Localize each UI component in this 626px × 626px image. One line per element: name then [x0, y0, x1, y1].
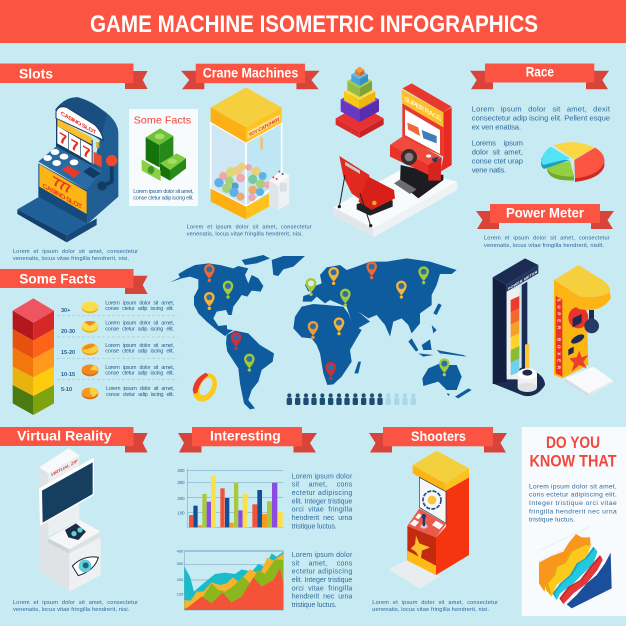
row 15-20: conse ctetur adip iscing elit. — [105, 349, 174, 355]
panel heading: DO YOU — [546, 434, 600, 452]
text: crane caption: venenatis, locus vitae fringilla hendrerit, nisi. — [187, 232, 303, 238]
panel text: Integer tristique orci vitae — [529, 500, 617, 507]
bar chart — [177, 468, 283, 527]
people pictogram — [287, 393, 416, 405]
ribbon heading: Slots: Slots — [19, 66, 53, 82]
ribbon heading: Crane Machines: Crane Machines — [203, 64, 298, 80]
row 10-15 — [61, 364, 174, 378]
stacked column chart — [13, 298, 54, 415]
text: interesting paragraph two: elit. Integer tristique — [292, 577, 352, 584]
icon: power meter machine — [493, 258, 613, 396]
text: interesting paragraph two: ectetur adipiscing — [292, 569, 352, 576]
age bracket rows — [57, 300, 178, 399]
icon: slot machine: 7 — [71, 136, 79, 157]
text: race paragraph — [472, 105, 611, 175]
panel: do you know that — [522, 427, 626, 616]
panel heading — [530, 434, 616, 471]
text: interesting paragraph two: tristique luctus. — [292, 602, 337, 609]
ribbon heading: Power Meter: Power Meter — [506, 204, 585, 220]
text: crane caption: Lorem et ipsum dolor sit amet, consectetur — [187, 225, 312, 231]
icon: slot machine: CASINO SLOT — [61, 110, 96, 137]
row 30+: 30+ — [61, 308, 70, 314]
row 10-15: 10-15 — [61, 372, 75, 378]
text: interesting paragraph one: ectetur adipiscing — [292, 490, 352, 497]
ribbon heading: Race — [470, 64, 609, 89]
text: race paragraph: Lorem ipsum dolor sit amet, dexit — [472, 105, 611, 114]
row 5-10: 5-10 — [61, 387, 72, 393]
row 20-30: conse ctetur adip iscing elit. — [105, 326, 174, 332]
world map — [170, 255, 472, 409]
text: power meter caption: venenatis, locus vitae fringilla hendrerit, nisilt. — [484, 243, 604, 249]
map pins — [204, 261, 450, 380]
panel text: fringilla hendrerit nec urna — [529, 509, 617, 516]
panel: some facts card: conse ctetur adip iscing elit. — [133, 196, 194, 202]
ribbon heading: Shooters: Shooters — [411, 428, 466, 444]
row 5-10: conse ctetur adip iscing elit. — [106, 392, 174, 398]
icon: money stacks — [142, 128, 186, 181]
text: interesting paragraph one — [292, 473, 353, 530]
icon: toy pyramid — [336, 67, 384, 138]
icon: slot machine: 777 — [53, 174, 71, 199]
panel: some facts card — [129, 109, 198, 206]
ribbon heading: Virtual Reality — [0, 427, 148, 452]
panel text — [529, 483, 617, 524]
icon: power meter machine: POWER METER — [508, 269, 537, 291]
row 10-15: Lorem ipsum dolor sit amet, — [105, 365, 174, 371]
bar chart: 300 — [177, 480, 185, 485]
icon: racing arcade machine: SUPER RACE — [404, 95, 442, 123]
pie chart — [541, 142, 604, 182]
text: slots caption — [13, 249, 138, 262]
text: virtual reality caption: venenatis, locus vitae fringilla hendrerit, nisi. — [13, 607, 130, 613]
ribbon heading: Crane Machines — [181, 64, 320, 89]
title: GAME MACHINE ISOMETRIC INFOGRAPHICS — [90, 11, 538, 38]
text: slots caption: venenatis, locus vitae fringilla hendrerit, nisi. — [13, 256, 129, 262]
row 30+: Lorem ipsum dolor sit amet, — [105, 300, 174, 306]
ribbon heading: Race: Race — [526, 64, 554, 80]
row 5-10: Lorem ipsum dolor sit amet, — [106, 386, 174, 392]
text: race paragraph: Lorems ipsum — [472, 139, 523, 148]
row 30+: conse ctetur adip iscing elit. — [105, 306, 174, 312]
icon: shooter arcade machine — [388, 451, 469, 588]
panel: some facts card: Some Facts — [134, 114, 191, 126]
area chart: 300 — [177, 561, 184, 566]
text: virtual reality caption: Lorem et ipsum dolor sit amet, consectetur — [13, 600, 138, 606]
icon: slot machine: 7 — [59, 130, 67, 150]
panel text: cons ectetur adipiscing elit. — [529, 492, 617, 499]
text: interesting paragraph one: hendrerit nec urna — [292, 515, 352, 522]
area chart: 100 — [177, 591, 184, 596]
text: race paragraph: ex ven enatisa. — [472, 123, 521, 132]
panel text: Lorem ipsum dolor sit amet, — [529, 483, 617, 490]
text: interesting paragraph one: Lorem ipsum dolor — [292, 473, 353, 480]
text: slots caption: Lorem et ipsum dolor sit amet, consectetur — [13, 249, 138, 255]
header banner — [0, 0, 626, 43]
text: race paragraph: dolor sit amet, — [472, 148, 523, 157]
row 15-20: Lorem ipsum dolor sit amet, — [105, 343, 174, 349]
text: interesting paragraph two: hendrerit nec urna — [292, 594, 352, 601]
panel: some facts card: Lorem ipsum dolor sit amet, — [133, 189, 194, 195]
text: race paragraph: conse ctet urap — [472, 157, 523, 166]
text: interesting paragraph two: orci vitae fringilla — [292, 585, 352, 592]
text: crane caption — [187, 225, 312, 238]
text: interesting paragraph one: orci vitae fringilla — [292, 507, 352, 514]
icon: crane machine — [211, 87, 289, 219]
row 30+ — [61, 300, 174, 314]
ribbon heading: Some Facts: Some Facts — [19, 271, 96, 287]
row 10-15: conse ctetur adip iscing elit. — [105, 371, 174, 377]
ring chart — [188, 369, 222, 406]
ribbon heading: Some Facts — [0, 269, 148, 294]
text: shooters caption — [372, 600, 498, 613]
ribbon heading: Interesting — [178, 427, 317, 452]
text: shooters caption: uenenatis, locus vitae fringilla hendrerit, nisi. — [372, 607, 489, 613]
row 20-30: 20-30 — [61, 329, 75, 335]
text: shooters caption: Lorem et ipsum dolor sit amet, consectetur — [372, 600, 498, 606]
bar chart: 200 — [177, 496, 185, 501]
continents — [170, 255, 472, 409]
icon: crane machine: TOY CATCHER — [249, 117, 280, 139]
icon: racing arcade machine — [333, 83, 457, 237]
ribbon heading: Virtual Reality: Virtual Reality — [17, 428, 112, 444]
icon: virtual reality booth: VIRTUAL ZIP — [51, 458, 78, 478]
area chart: 200 — [177, 577, 184, 582]
area chart: 400 — [177, 549, 184, 554]
icon: slot machine: CASINO SLOT — [43, 182, 83, 212]
text: interesting paragraph one: elit. Integer tristique — [292, 498, 352, 505]
text: power meter caption — [484, 236, 610, 249]
icon: slot machine — [17, 97, 118, 242]
row 20-30: Lorem ipsum dolor sit amet, — [105, 321, 174, 327]
text: power meter caption: Lorem et ipsum dolor sit amet, consectetur — [484, 236, 610, 242]
text: interesting paragraph one: sit amet, cons — [292, 482, 353, 489]
text: interesting paragraph two — [292, 552, 353, 609]
ribbon heading: Power Meter — [476, 204, 614, 229]
text: race paragraph: vene natis. — [472, 166, 506, 175]
panel text: tristique luctus. — [529, 517, 575, 524]
row 15-20 — [61, 343, 174, 356]
icon: power meter machine: SUPER BOXER — [557, 299, 562, 370]
ribbon heading: Shooters — [369, 427, 507, 452]
icon: slot machine: 7 — [82, 143, 91, 163]
text: interesting paragraph two: sit amet, cons — [292, 560, 353, 567]
text: virtual reality caption — [13, 600, 138, 613]
text: interesting paragraph one: tristique luctus. — [292, 523, 337, 530]
icon: virtual reality booth — [39, 448, 101, 592]
ribbon heading: Slots — [0, 64, 148, 89]
ribbon heading: Interesting: Interesting — [210, 428, 281, 444]
area chart — [177, 549, 283, 610]
row 15-20: 15-20 — [61, 350, 75, 356]
text: interesting paragraph two: Lorem ipsum dolor — [292, 552, 353, 559]
row 20-30 — [61, 321, 174, 335]
bar chart: 100 — [177, 510, 185, 515]
text: race paragraph: consectetur adip iscing elit. Pellent esque — [472, 114, 610, 123]
isometric stepped chart — [539, 527, 612, 608]
row 5-10 — [61, 386, 174, 399]
bar chart: 400 — [177, 468, 185, 473]
